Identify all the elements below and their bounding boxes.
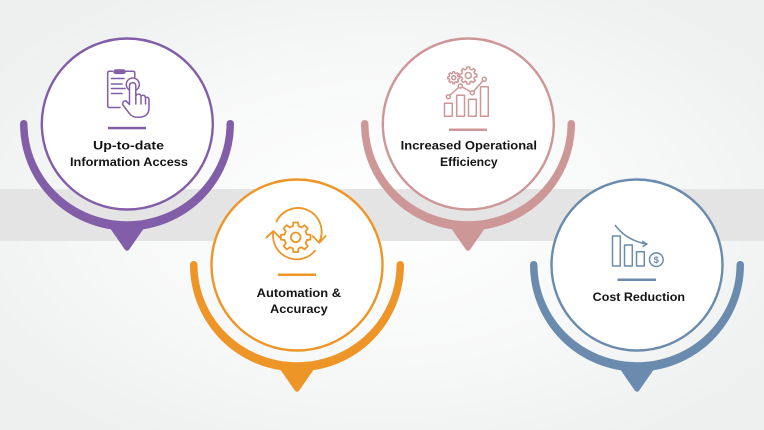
pointer: orange xyxy=(276,367,318,392)
cradle arc: purple xyxy=(20,120,234,230)
label: Efficiency xyxy=(440,155,498,169)
divider xyxy=(618,278,656,281)
cradle arc: orange xyxy=(190,261,404,371)
icon: falling bars with dollar coin: $ xyxy=(654,255,660,266)
circle: purple xyxy=(42,38,213,210)
icon: gear with rotating arrows xyxy=(266,208,326,259)
panel: increased operational efficiency xyxy=(361,38,575,251)
label xyxy=(401,138,537,169)
label: Cost Reduction xyxy=(593,290,685,304)
divider xyxy=(278,274,316,276)
icon: gears and rising bar chart xyxy=(444,67,488,116)
pointer: purple xyxy=(106,226,148,251)
pointer: blue xyxy=(616,367,658,392)
panel: up-to-date information access xyxy=(20,38,234,251)
icon: falling bars with dollar coin xyxy=(612,225,663,266)
label: Accuracy xyxy=(270,302,328,316)
label: Information Access xyxy=(70,155,188,169)
circle: pink xyxy=(383,38,554,210)
divider xyxy=(108,127,146,129)
label xyxy=(70,138,188,169)
circle: blue xyxy=(552,180,722,350)
panel: cost reduction xyxy=(530,180,744,392)
label: Increased Operational xyxy=(401,138,537,152)
icon: clipboard with pointing hand xyxy=(108,70,149,117)
label: Automation & xyxy=(257,286,341,300)
divider xyxy=(449,128,487,131)
horizontal band xyxy=(0,189,764,241)
panel: automation and accuracy xyxy=(190,180,404,392)
cradle arc: pink xyxy=(361,120,575,230)
label: Up-to-date xyxy=(93,138,164,152)
pointer: pink xyxy=(447,226,489,251)
circle: orange xyxy=(212,180,382,350)
label xyxy=(257,286,341,316)
cradle arc: blue xyxy=(530,261,744,372)
